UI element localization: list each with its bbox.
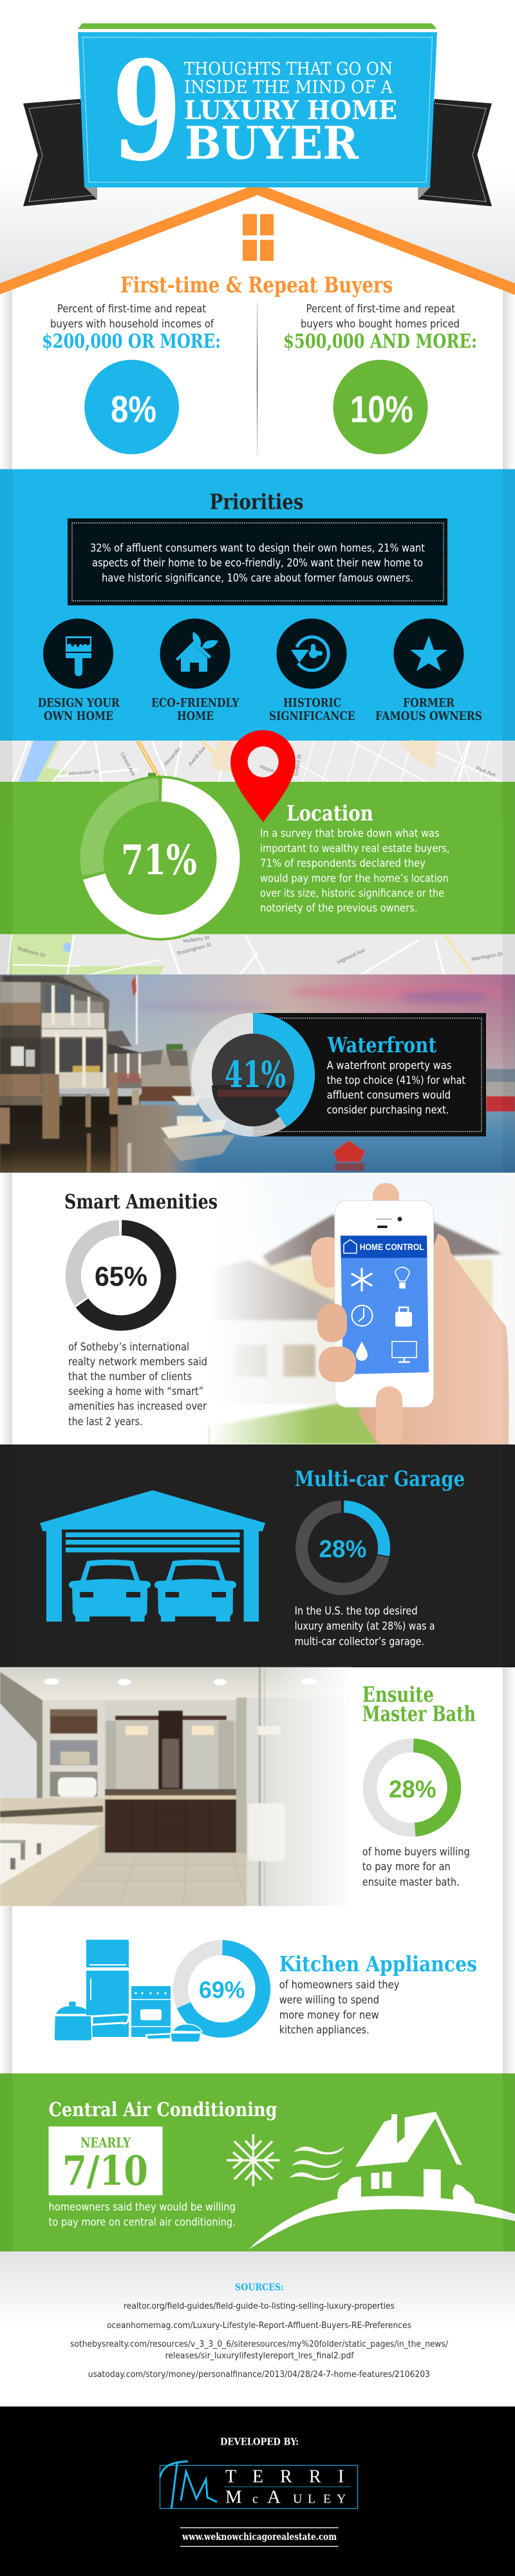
panel: central air conditioning	[0, 2074, 515, 2251]
text block: location: notoriety of the previous owners.	[260, 902, 417, 915]
title banner	[23, 23, 492, 206]
label: historic significance: SIGNIFICANCE	[269, 709, 355, 723]
extension house	[106, 1030, 132, 1046]
flag pole	[136, 975, 138, 1045]
text block: income: $200,000 OR MORE:	[42, 330, 221, 353]
callout: nearly 7/10	[49, 2126, 162, 2195]
donut chart: 41%	[201, 1023, 304, 1126]
icon: kitchen appliances	[54, 1940, 202, 2042]
panel: sources	[0, 2251, 515, 2406]
callout: nearly 7/10: 7/10	[62, 2147, 148, 2195]
label: historic significance	[269, 696, 355, 723]
text block: bath: to pay more for an	[362, 1861, 451, 1873]
text block: bath: ensuite master bath.	[362, 1876, 460, 1888]
donut chart: 28% bath	[368, 1744, 456, 1831]
blue banner	[78, 32, 437, 187]
donut chart: 28%	[294, 1499, 392, 1596]
upper map: Park Ave	[475, 765, 497, 778]
stat circle: 8%	[84, 360, 179, 454]
stat circle: 10%: 10%	[350, 389, 413, 430]
heading: kitchen appliances: Kitchen Appliances	[279, 1951, 477, 1976]
image: hand holding phone: HOME CONTROL	[360, 1242, 424, 1252]
heading: multi-car garage: Multi-car Garage	[295, 1466, 465, 1491]
text block: bath	[362, 1846, 470, 1888]
right ribbon	[418, 99, 492, 206]
callout: priorities summary: have historic significance, 10% care about former famous owners.	[102, 572, 413, 585]
divider	[257, 303, 258, 456]
heading: first-time and repeat buyers: First-time & Repeat Buyers	[120, 272, 393, 298]
lower map: Mulberry St	[183, 934, 211, 944]
text block: smart amenities: the last 2 years.	[68, 1416, 143, 1428]
icon: house on hill	[248, 2112, 515, 2249]
right boats	[486, 1096, 515, 1112]
heading: priorities: Priorities	[210, 489, 304, 514]
phone icon: bulb	[395, 1267, 409, 1288]
panel: footer	[0, 2406, 515, 2576]
text block: kitchen: were willing to spend	[279, 1994, 379, 2006]
upper map: Clinton Ave	[119, 752, 136, 777]
text block: price: Percent of first-time and repeat	[306, 303, 455, 316]
text block: smart amenities: seeking a home with “smart”	[68, 1385, 203, 1398]
panel: waterfront	[0, 975, 515, 1173]
heading: ensuite master bath: Ensuite	[362, 1682, 434, 1707]
lower map: Robinson Dr	[17, 945, 46, 959]
label: former famous owners: FORMER	[403, 696, 454, 710]
text block: source links: oceanhomemag.com/Luxury-Lifestyle-Report-Affluent-Buyers-RE-Preferences	[107, 2321, 411, 2331]
text block: air conditioning: homeowners said they would be willing	[49, 2201, 236, 2213]
text block: bath: of home buyers willing	[362, 1846, 470, 1858]
text block: waterfront: A waterfront property was	[327, 1059, 452, 1072]
donut chart: 28% bath: 28%	[389, 1776, 436, 1803]
upper map: Alexander	[163, 746, 182, 767]
label: eco-friendly home: ECO-FRIENDLY	[151, 696, 239, 710]
lower map	[8, 934, 503, 975]
text block: kitchen: kitchen appliances.	[279, 2024, 370, 2036]
icon: eco-friendly house	[160, 618, 230, 689]
label: historic significance: HISTORIC	[283, 696, 341, 710]
label: former famous owners: FAMOUS OWNERS	[375, 709, 482, 723]
label: eco-friendly home	[151, 696, 239, 723]
heading: location: Location	[286, 800, 373, 826]
text block: source links: sothebysrealty.com/resources/v_3_3_0_6/siteresources/my%20folder/static_pages/in_the_news/	[70, 2340, 449, 2349]
icon: window	[243, 214, 274, 261]
text block: air conditioning	[49, 2201, 236, 2228]
panel: ensuite master bath	[0, 1667, 515, 1906]
phone icon: clock	[351, 1305, 372, 1326]
heading: waterfront: Waterfront	[327, 1032, 437, 1057]
upper map	[13, 741, 515, 831]
icon: historic clock	[277, 618, 346, 689]
heading: sources: SOURCES:	[235, 2282, 284, 2293]
phone icon: snowflake	[352, 1269, 371, 1291]
callout: priorities summary	[68, 518, 447, 605]
phone icon: lock	[395, 1307, 412, 1327]
label: design your own home: DESIGN YOUR	[38, 696, 120, 710]
text block: location: important to wealthy real estate buyers,	[260, 842, 449, 855]
text block: garage: multi-car collector’s garage.	[295, 1635, 424, 1647]
text block: price: buyers who bought homes priced	[301, 317, 460, 330]
upper map: Oxford St	[293, 753, 303, 776]
text block: source links: usatoday.com/story/money/personalfinance/2013/04/28/24-7-home-features/2106203	[88, 2370, 430, 2380]
donut chart: 28%: 28%	[319, 1536, 367, 1563]
left car	[69, 1560, 151, 1622]
text block: kitchen	[279, 1979, 400, 2036]
title line 2: INSIDE THE MIND OF A	[184, 77, 393, 97]
logo: Terri McAuley: c	[252, 2492, 258, 2506]
label: former famous owners	[375, 696, 482, 723]
text block: smart amenities	[68, 1341, 207, 1428]
donut chart: 65%: 65%	[95, 1262, 147, 1293]
icon: star	[394, 618, 464, 689]
logo: Terri McAuley: ULEY	[293, 2492, 346, 2506]
heading: ensuite master bath: Master Bath	[362, 1701, 476, 1726]
photo: house background	[210, 1173, 507, 1444]
green top fold	[78, 23, 437, 29]
callout: priorities summary: 32% of affluent consumers want to design their own homes, 21% want	[90, 542, 425, 555]
donut chart: 71%	[77, 775, 242, 940]
text block: kitchen: more money for new	[279, 2009, 379, 2022]
phone screen	[341, 1236, 429, 1374]
icon: snowflake	[227, 2134, 280, 2186]
photo: bathroom	[0, 1667, 354, 1906]
text block: location: 71% of respondents declared they	[260, 857, 426, 870]
upper map: Alexander St	[69, 769, 99, 777]
panel: house with roof	[0, 184, 515, 470]
callout: priorities summary: aspects of their home to be eco-friendly, 20% want their new home to	[92, 556, 423, 569]
lower map: Rockingham St	[176, 942, 212, 956]
text block: smart amenities: amenities has increased over	[68, 1400, 207, 1413]
icon: air waves	[289, 2146, 345, 2180]
brick wall	[140, 1086, 191, 1101]
text block: garage: In the U.S. the top desired	[295, 1605, 418, 1617]
callout: nearly 7/10: NEARLY	[80, 2134, 131, 2150]
text block: income: Percent of first-time and repeat	[57, 303, 206, 316]
text block: smart amenities: realty network members said	[68, 1356, 207, 1368]
side strips on coloured sections	[0, 469, 515, 2251]
heading: central air conditioning: Central Air Conditioning	[49, 2099, 277, 2121]
top background	[0, 0, 515, 303]
text block: waterfront: affluent consumers would	[327, 1089, 451, 1102]
panel: kitchen appliances	[0, 1906, 515, 2074]
panel: priorities	[0, 469, 515, 741]
stat circle: 10%	[333, 360, 427, 454]
numeral 9: 9	[112, 31, 182, 191]
icon: map pin	[230, 730, 295, 822]
label: design your own home: OWN HOME	[44, 709, 113, 723]
lower map: Highland Ave	[336, 947, 366, 965]
title line 4: BUYER	[185, 117, 359, 170]
donut chart: 71%: 71%	[121, 837, 197, 885]
phone icon: drop	[356, 1341, 368, 1361]
text block: garage	[295, 1605, 435, 1647]
main house	[0, 975, 109, 1096]
phone icon: monitor	[392, 1341, 417, 1362]
label: eco-friendly home: HOME	[177, 709, 214, 723]
upper map: Harper St	[259, 763, 282, 777]
logo: Terri McAuley: TERRI	[225, 2467, 344, 2486]
text block: location: over its size, historic significance or the	[260, 887, 444, 900]
text block: waterfront	[327, 1059, 465, 1117]
title line 1: THOUGHTS THAT GO ON	[184, 59, 393, 79]
text block: location	[260, 828, 449, 915]
reflections on water	[118, 1105, 201, 1173]
lower map: Warrington Dr	[471, 951, 503, 962]
photo: harbor scene	[0, 975, 515, 1173]
heading: ensuite master bath	[362, 1682, 476, 1726]
text block: source links: releases/sir_luxurylifestylereport_lres_final2.pdf	[165, 2351, 354, 2361]
text block: air conditioning: to pay more on central air conditioning.	[49, 2216, 236, 2228]
text block: smart amenities: that the number of clients	[68, 1370, 192, 1383]
panel: location map background	[0, 741, 515, 975]
logo: Terri McAuley: A	[267, 2487, 281, 2508]
text block: smart amenities: of Sotheby’s international	[68, 1341, 189, 1354]
text block: income: buyers with household incomes of	[50, 317, 214, 330]
text block: location: would pay more for the home’s location	[260, 872, 449, 885]
stat circle: 8%: 8%	[111, 389, 156, 430]
donut chart: 69%	[180, 1947, 264, 2031]
icon: paint brush	[43, 618, 113, 689]
upper map: Averill Ave	[187, 745, 207, 767]
distant houses	[140, 1050, 166, 1088]
panel: multi-car garage	[0, 1444, 515, 1667]
label: developed by: DEVELOPED BY:	[220, 2436, 299, 2448]
text block: income	[42, 303, 221, 353]
white boat	[161, 1119, 227, 1139]
pier pilings	[0, 1096, 140, 1173]
panel: smart amenities	[0, 1173, 515, 1448]
text block: garage: luxury amenity (at 28%) was a	[295, 1620, 435, 1632]
panel: location	[0, 730, 515, 940]
donut chart: 41%: 41%	[225, 1054, 286, 1096]
donut chart: 69%: 69%	[199, 1977, 245, 2003]
text block: kitchen: of homeowners said they	[279, 1979, 400, 1991]
website url: www.weknowchicagorealestate.com	[182, 2531, 337, 2543]
text block: source links: realtor.org/field-guides/field-guide-to-listing-selling-luxury-properties	[124, 2302, 395, 2311]
text block: location: In a survey that broke down what was	[260, 828, 440, 840]
heading: smart amenities: Smart Amenities	[64, 1190, 218, 1213]
callout: waterfront dark box	[253, 1013, 486, 1137]
title line 3: LUXURY HOME	[184, 95, 397, 126]
text block: waterfront: the top choice (41%) for what	[327, 1074, 465, 1087]
red boat	[333, 1141, 365, 1171]
text block: waterfront: consider purchasing next.	[327, 1104, 449, 1117]
image: hand holding phone	[309, 1183, 509, 1448]
logo: Terri McAuley	[160, 2461, 358, 2508]
logo: Terri McAuley: M	[225, 2487, 242, 2508]
left ribbon	[23, 99, 97, 206]
text block: price	[283, 303, 477, 353]
icon: garage with two cars	[40, 1490, 265, 1622]
right car	[154, 1560, 236, 1622]
text block: source links	[70, 2302, 449, 2380]
label: design your own home	[38, 696, 120, 723]
donut chart: 65%	[55, 1209, 187, 1341]
